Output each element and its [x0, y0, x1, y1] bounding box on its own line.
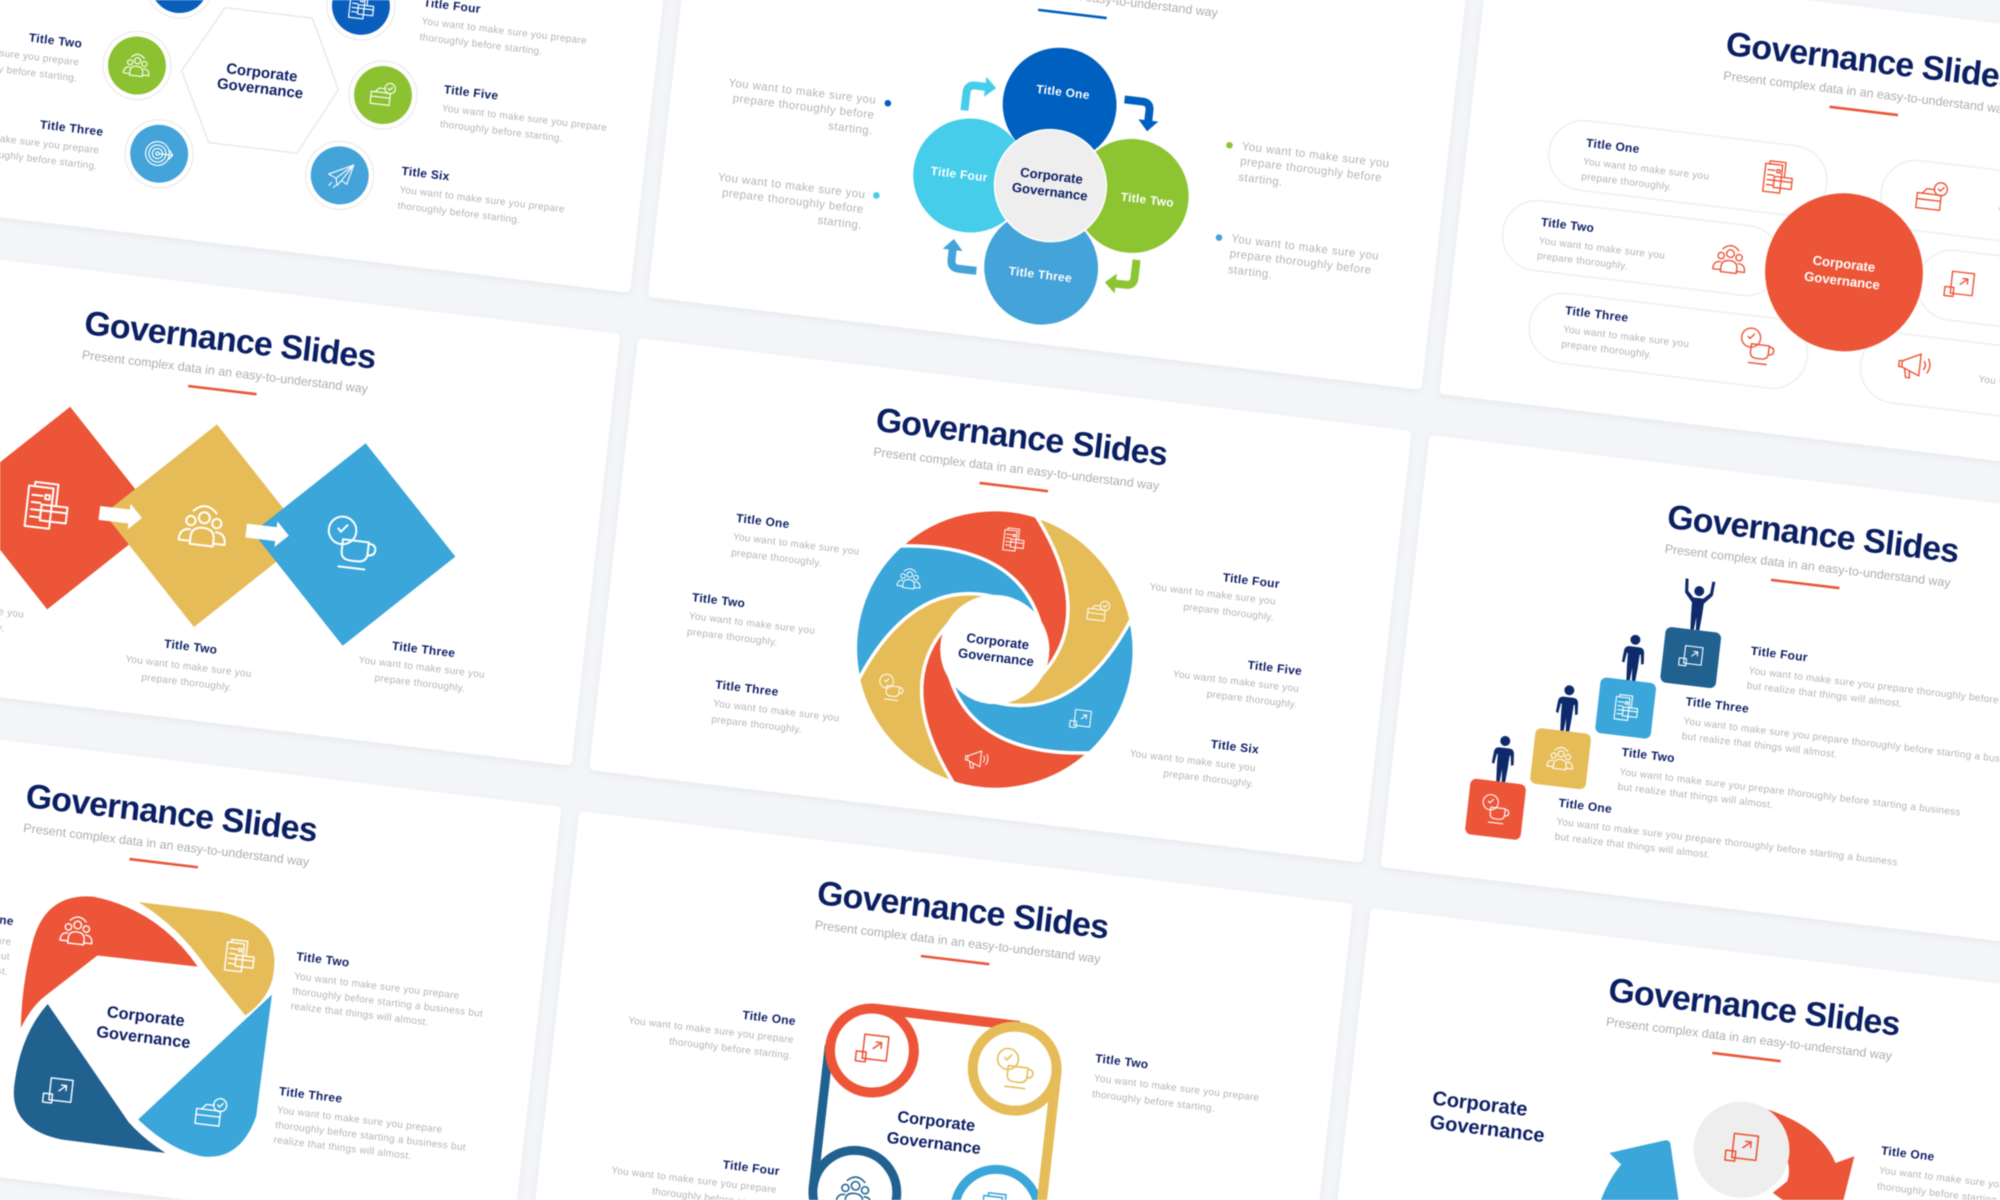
diamond: title three: [241, 431, 467, 658]
label: title two: [1091, 1051, 1263, 1120]
heading: Governance Slides: [815, 874, 1111, 947]
icon: cup: [995, 1047, 1035, 1089]
heading: Governance Slides: [874, 401, 1170, 474]
subheading: Present complex data in an easy-to-understand way: [1664, 542, 1952, 590]
label: title one: Title One: [1558, 796, 1613, 816]
diamond: title one: [0, 395, 171, 621]
label: title four: Title Four: [1750, 644, 1809, 664]
arrow: red: [1737, 1106, 1859, 1200]
circle: title three: [978, 204, 1104, 331]
heading underline: [921, 955, 989, 966]
icon: people: [836, 1175, 874, 1200]
label: title one: [0, 892, 15, 978]
label: title two: [0, 17, 83, 85]
label: title two: but realize that things will almost.: [1617, 782, 1774, 811]
panel: diamonds slide, middle left: [0, 241, 620, 766]
label: title four: Title Four: [722, 1157, 781, 1178]
heading underline: [188, 385, 257, 395]
label: title three: [711, 677, 842, 740]
spiral chart: [804, 469, 1186, 830]
label: title two: You want to make sure you: [125, 654, 252, 680]
heading underline: [1771, 579, 1840, 589]
label: title five: You want to make sure you: [1172, 669, 1300, 695]
label: title five: Title Five: [1247, 658, 1303, 678]
shutter blade: dark blue: [9, 1001, 181, 1153]
ring frame: blue: [950, 1165, 1043, 1200]
icon: case: [195, 1096, 227, 1127]
label: title three: thoroughly before starting a business but: [275, 1120, 466, 1154]
arrow: two to three: [245, 518, 290, 549]
subheading: Present complex data in an easy-to-understand way: [873, 445, 1161, 493]
label: title four: You want to make sure you: [1149, 582, 1276, 608]
pill: title four: [1877, 156, 2000, 259]
circle: title four: [323, 0, 399, 44]
label: title three: Title Three: [1685, 694, 1750, 716]
centre circle: Governance: [1011, 180, 1088, 204]
circle: title two: [1069, 133, 1195, 259]
icon: expand: [855, 1033, 889, 1064]
pill: title two: prepare thoroughly.: [1537, 251, 1628, 272]
note: title four: prepare thoroughly before: [721, 187, 864, 216]
label: title two: thoroughly before starting a business but: [292, 986, 483, 1020]
circle: title one: [997, 41, 1123, 168]
centre label: Corporate: [966, 630, 1030, 653]
label: title six: Title Six: [401, 164, 450, 183]
circle: title one: [142, 0, 217, 22]
pill: title three: prepare thoroughly.: [1561, 339, 1652, 361]
icon: document: [1003, 527, 1025, 552]
label: title four: You want to make sure you prepare: [421, 16, 588, 47]
circle: title three: [122, 116, 197, 192]
label: title five: Title Five: [443, 82, 499, 103]
label: title six: You want to make sure you: [1129, 748, 1256, 774]
side label: Corporate: [1431, 1088, 1529, 1121]
label: title one: thoroughly before starting.: [669, 1036, 792, 1062]
label: title two: Title Two: [28, 31, 83, 51]
label: title six: prepare thoroughly.: [1163, 768, 1255, 790]
label: title two: Title Two: [691, 590, 746, 610]
label: title four: thoroughly before starting.: [419, 32, 543, 58]
label: title six: You want to make sure you prepare: [399, 185, 565, 215]
heading: Governance Slides: [1665, 498, 1961, 571]
note: title one: You want to make sure you: [728, 77, 877, 107]
circle: title two: Title Two: [1120, 190, 1175, 210]
icon: document: [980, 1192, 1015, 1200]
label: title four: but realize that things will almost.: [1746, 680, 1903, 710]
shutter blade: blue: [135, 980, 272, 1162]
panel: spiral slide, centre: [589, 338, 1412, 863]
label: title two: You want to make sure you prepare: [1093, 1073, 1260, 1104]
subheading: Present complex data in an easy-to-understand way: [1605, 1015, 1893, 1063]
label: title two: Title Two: [1621, 745, 1676, 765]
subheading: Present complex data in an easy-to-understand way: [814, 918, 1102, 966]
label: title two: You want to make sure you: [688, 611, 816, 637]
ring frame: yellow: [957, 1022, 1061, 1200]
centre circle: Corporate: [1812, 253, 1876, 275]
note: title four: [714, 172, 880, 234]
label: title three: You want to make sure you: [358, 655, 485, 681]
step: title three: [1595, 631, 1662, 739]
heading underline: [979, 482, 1048, 492]
subheading: Present complex data in an easy-to-understand way: [23, 821, 311, 869]
heading: Governance Slides: [1607, 971, 1903, 1044]
circle: title four: Title Four: [930, 164, 989, 185]
pill: title two: Title Two: [1540, 215, 1595, 235]
label: title four: Title Four: [1222, 570, 1281, 591]
note: title four: starting.: [817, 215, 863, 232]
heading underline: [1712, 1052, 1781, 1062]
arrow: four to one: [964, 75, 997, 114]
circle: title one: Title One: [1036, 82, 1091, 102]
shutter blade: yellow: [127, 902, 280, 1018]
label: title four: [419, 0, 590, 63]
centre circle: [1688, 1096, 1795, 1200]
note: title three: prepare thoroughly before: [1229, 248, 1372, 277]
label: title one: [731, 511, 862, 574]
subheading: Present complex data in an easy-to-understand way: [81, 348, 369, 396]
label: title one: You want to make sure you: [732, 532, 860, 558]
icon: document: [25, 481, 70, 531]
label: title one: [1876, 1143, 2000, 1200]
label: title one: Title One: [1880, 1143, 1935, 1164]
hexagon: [174, 3, 346, 157]
label: title one: You want to make sure you prepare thoroughly before starting a business: [1556, 817, 1898, 868]
label: title five: You want to make sure you prepare: [441, 103, 608, 134]
centre circle: Governance: [1803, 269, 1881, 293]
panel: arrows slide, bottom right: [1322, 908, 2000, 1200]
label: title five: [439, 82, 610, 150]
label: title three: Title Three: [715, 677, 779, 699]
label: title six: thoroughly before starting.: [397, 201, 521, 226]
label: title two: Title Two: [296, 949, 350, 970]
label: title three: You want to make sure you: [713, 698, 840, 724]
pill: title one: You want to make sure you: [1582, 157, 1710, 183]
label: title four: [1746, 644, 2000, 732]
arrow: blue: [1589, 1132, 1691, 1200]
diamond: title two: [93, 412, 318, 639]
heading: Governance Slides: [83, 304, 378, 377]
label: title one: You want to make sure you prepare: [628, 1015, 794, 1046]
label: title three: [356, 635, 488, 697]
label: title two: [686, 590, 818, 653]
note: title three: starting.: [1227, 264, 1273, 281]
label: title two: thoroughly before starting.: [1092, 1089, 1215, 1115]
heading: Governance Slides: [24, 777, 320, 850]
note: title three: [1212, 231, 1380, 294]
label: title four: You want to make sure you prepare: [611, 1165, 777, 1196]
label: title three: prepare thoroughly.: [374, 673, 466, 695]
icon: expand: [1069, 709, 1091, 729]
panel: hexagon slide, top left: [0, 0, 679, 293]
circle: title three: Title Three: [1008, 264, 1073, 285]
heading underline: [1829, 106, 1898, 116]
label: title four: [609, 1144, 781, 1200]
pill: title three: Title Three: [1564, 303, 1629, 325]
icon: people: [178, 503, 229, 548]
label: title two: realize that things will almost.: [290, 1001, 429, 1028]
panel: shutter slide, bottom left: [0, 714, 562, 1200]
pill: title three: You want to make sure you: [1562, 324, 1690, 350]
note: title one: prepare thoroughly before: [732, 93, 875, 122]
label: title three: Title Three: [39, 117, 104, 139]
circle: title two: [99, 28, 175, 103]
label: title one: but realize that things will almost.: [1554, 832, 1711, 861]
pill: title three: [1525, 289, 1811, 392]
centre label: Corporate: [106, 1003, 186, 1030]
centre label: Corporate: [896, 1108, 976, 1135]
pill: title six: [1857, 329, 2000, 432]
icon: expand: [1725, 1133, 1758, 1164]
label: title two: Title Two: [1094, 1051, 1149, 1071]
icon: megaphone: [965, 749, 989, 770]
label: title three: but realize that things will almost.: [1681, 731, 1838, 761]
label: title one: Title One: [735, 511, 790, 531]
note: title three: You want to make sure you: [1231, 233, 1380, 263]
label: title one: [1554, 796, 1901, 883]
note: title two: You want to make sure you: [1241, 141, 1390, 170]
circle: title six: [302, 138, 377, 213]
panel: four circles slide, top centre: [648, 0, 1470, 390]
arrow: two to three: [1104, 256, 1137, 296]
centre circle: Corporate: [1019, 165, 1084, 187]
pill: title one: prepare thoroughly.: [1581, 171, 1672, 193]
pill: title two: You want to make sure you: [1538, 236, 1666, 262]
label: title two: [290, 949, 488, 1035]
hexagon label: Governance: [216, 75, 304, 102]
label: title two: [123, 632, 255, 696]
icon: cup: [878, 673, 905, 701]
heading underline: [1038, 9, 1107, 19]
label: title five: thoroughly before starting.: [439, 119, 563, 145]
label: title six: Title Six: [1210, 737, 1260, 757]
label: title five: prepare thoroughly.: [1206, 689, 1298, 711]
ring frame: dark blue: [808, 1045, 913, 1200]
label: title five: [1170, 649, 1303, 711]
panel: stairs slide, middle right: [1380, 435, 2000, 960]
label: title four: [1147, 562, 1281, 624]
circle: title four: [907, 112, 1033, 239]
label: title three: [273, 1084, 470, 1169]
label: title three: prepare thoroughly.: [711, 714, 802, 736]
label: title two: You want to make sure you prepare: [293, 971, 460, 1002]
label: title one: [0, 574, 27, 636]
heading underline: [129, 858, 198, 869]
label: title two: prepare thoroughly.: [686, 627, 778, 649]
label: title six: [1127, 727, 1260, 790]
note: title two: prepare thoroughly before: [1240, 156, 1382, 185]
icon: document: [224, 939, 256, 973]
label: title six: [397, 164, 568, 231]
note: title two: [1222, 139, 1390, 201]
label: title one: Title One: [742, 1008, 797, 1028]
step: title two: [1530, 682, 1597, 790]
label: title three: realize that things will almost.: [273, 1135, 412, 1162]
circle: title five: [345, 57, 421, 133]
pill: title five: [1913, 246, 2000, 349]
arrow: one to two: [1121, 99, 1160, 133]
label: title one: [626, 994, 797, 1062]
centre label: Governance: [95, 1023, 191, 1052]
hexagon label: Corporate: [225, 60, 298, 86]
ring frame: red: [826, 1004, 1020, 1109]
step: title one: [1465, 732, 1532, 840]
pill: title one: Title One: [1585, 136, 1640, 156]
pill: title two: [1499, 197, 1784, 299]
label: title two: prepare thoroughly.: [141, 672, 233, 694]
shutter blade: red: [19, 890, 204, 1048]
pill: title one: [1545, 117, 1831, 219]
icon: people: [60, 915, 95, 946]
label: title three: Title Three: [391, 639, 456, 660]
label: title one: prepare thoroughly.: [731, 548, 822, 569]
icon: expand: [43, 1077, 73, 1105]
side label: Governance: [1429, 1112, 1546, 1147]
note: title two: starting.: [1238, 172, 1283, 189]
centre circle: [1757, 184, 1931, 360]
icon: people: [897, 568, 922, 590]
panel: rings slide, bottom centre: [530, 811, 1353, 1200]
panel: pills slide, top right: [1439, 0, 2000, 487]
step: title four: [1660, 577, 1727, 689]
label: title three: Title Three: [278, 1084, 343, 1106]
label: title three: [1681, 694, 2000, 783]
label: title two: You want to make sure you prepare thoroughly before starting a business: [1619, 767, 1961, 819]
arrow: three to four: [941, 238, 980, 271]
centre circle: [989, 123, 1112, 248]
label: title three: [0, 105, 104, 173]
label: title three: You want to make sure you prepare: [276, 1105, 443, 1136]
label: title four: prepare thoroughly.: [1183, 602, 1275, 624]
centre label: Governance: [957, 645, 1035, 669]
label: title two: [1617, 745, 1964, 834]
icon: case: [1087, 599, 1110, 621]
arrow: one to two: [98, 500, 143, 531]
note: title one: starting.: [828, 120, 873, 138]
label: title two: Title Two: [163, 637, 218, 657]
centre label: Governance: [886, 1129, 982, 1158]
note: title one: [724, 77, 892, 139]
icon: cup: [325, 515, 379, 571]
note: title four: You want to make sure you: [717, 172, 866, 201]
